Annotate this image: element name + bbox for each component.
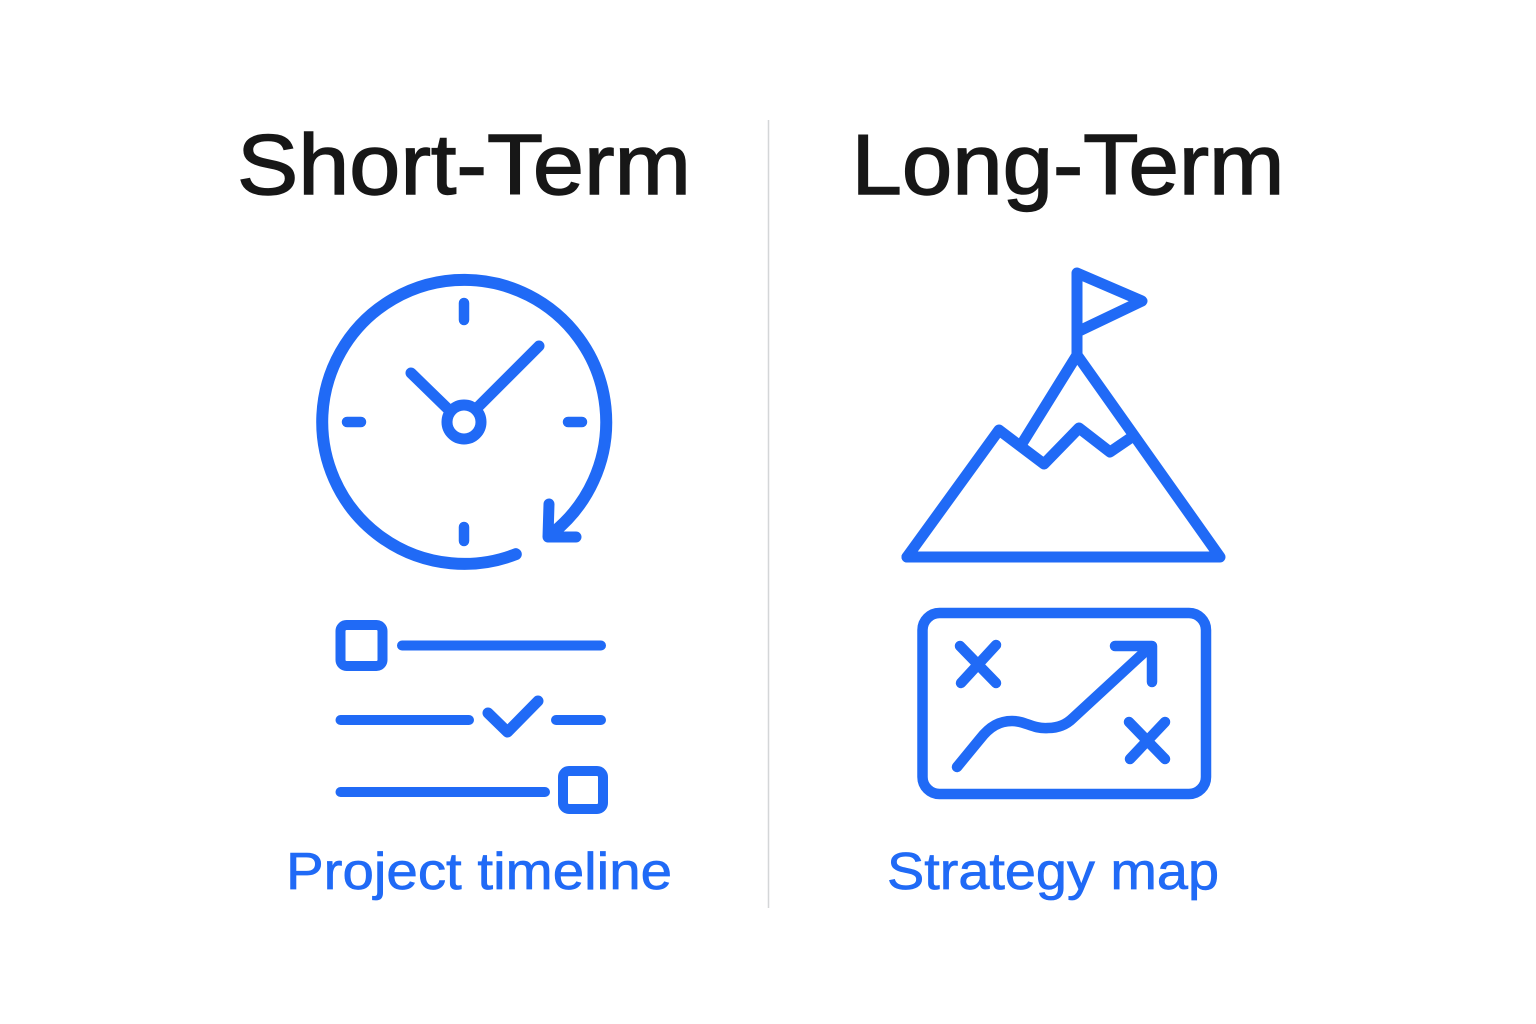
icon: project timeline checklist [340, 625, 603, 809]
icon: clock with return arrow [322, 280, 606, 564]
label: Strategy map: Strategy map [887, 843, 1219, 901]
icon: mountain with flag [907, 273, 1220, 557]
heading: Long-Term: Long-Term [852, 118, 1284, 213]
heading: Short-Term: Short-Term [237, 118, 691, 213]
label: Project timeline: Project timeline [286, 843, 672, 901]
icon: strategy map [922, 613, 1206, 794]
